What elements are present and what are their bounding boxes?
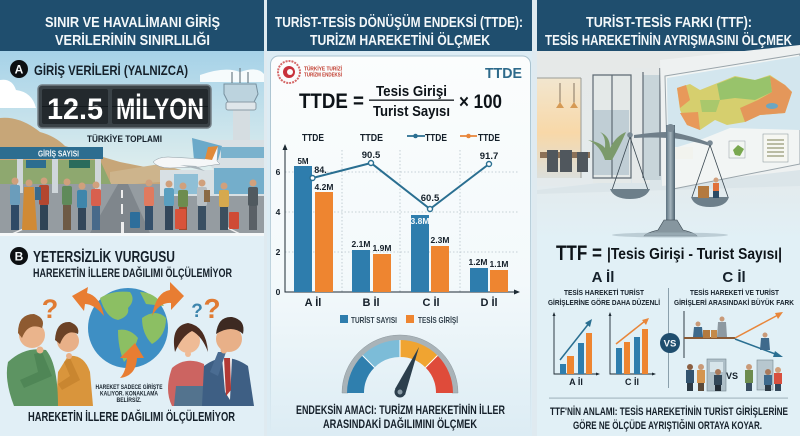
chart legend header: TTDE xyxy=(425,132,447,144)
thinking people, right xyxy=(168,317,254,406)
combo chart: 1.2M xyxy=(469,257,487,267)
turnstile groups: VS xyxy=(726,371,738,381)
arrows leaving globe xyxy=(72,282,184,378)
comparison: C İl xyxy=(674,269,794,391)
combo chart: 1.1M xyxy=(490,259,508,269)
combo chart: 1.9M xyxy=(373,243,391,253)
combo chart: 3.8M xyxy=(411,216,429,226)
combo chart: 6 xyxy=(276,167,281,177)
icon: question marks: ? xyxy=(203,293,221,324)
thinking people, left xyxy=(7,314,93,406)
formula: TTDE: Tesis Girişi xyxy=(376,83,447,100)
index purpose caption: ARASINDAKİ DAĞILIMINI ÖLÇMEK xyxy=(323,418,478,431)
combo chart: C İl xyxy=(422,296,440,309)
airport scene xyxy=(0,51,264,236)
airport terminal and tower xyxy=(160,68,264,196)
divider with VS badge xyxy=(660,288,680,388)
chart legend: TURİST SAYISI xyxy=(351,315,397,325)
icon: question marks: ? xyxy=(191,301,203,322)
left panel heading: VERİLERİNİN SINIRLILIĞI xyxy=(55,31,210,49)
note: movement remains at entry xyxy=(96,383,163,404)
panel: TTDE index xyxy=(267,0,532,436)
map of Türkiye xyxy=(665,54,800,190)
middle panel heading: TURİZM HAREKETİNİ ÖLÇMEK xyxy=(310,32,490,49)
entry gate: GİRİŞ SAYISI: GİRİŞ SAYISI xyxy=(38,150,79,158)
flip board: 12.5 MİLYON xyxy=(38,85,211,128)
note: movement remains at entry: HAREKET SADECE GİRİŞTE xyxy=(96,383,163,391)
logo: tourism index: TURİZM ENDEKSİ xyxy=(304,72,343,78)
chart legend xyxy=(340,315,458,325)
index purpose caption xyxy=(296,404,506,431)
comparison: C İl: C İl xyxy=(722,269,746,286)
icon: airplane xyxy=(153,146,220,171)
office scene xyxy=(537,45,800,240)
middle panel heading xyxy=(267,0,532,51)
combo chart: 4 xyxy=(276,207,281,217)
note: movement remains at entry: BELİRSİZ. xyxy=(116,396,142,404)
icon: balance scale xyxy=(610,124,729,238)
comparison: A İl xyxy=(548,269,660,387)
combo chart: A İl xyxy=(305,296,321,309)
formula: TTDE: Turist Sayısı xyxy=(373,103,450,120)
section A heading xyxy=(10,60,188,78)
combo chart: 2.3M xyxy=(431,235,449,245)
section B heading: HAREKETİN İLLERE DAĞILIMI ÖLÇÜLEMİYOR xyxy=(33,267,233,280)
combo chart: D İl xyxy=(480,296,498,309)
logo: tourism index: TÜRKİYE TURİZİ xyxy=(304,66,343,72)
mini bar chart: A İl xyxy=(552,312,656,387)
icon: question marks xyxy=(42,293,221,324)
chart legend header: TTDE xyxy=(478,132,500,144)
diverging arrows xyxy=(684,311,783,358)
icon: globe xyxy=(88,288,168,368)
flip board: 12.5 MİLYON: MİLYON xyxy=(116,93,204,126)
divider with VS badge: VS xyxy=(664,338,676,350)
formula: TTF xyxy=(556,242,782,265)
section A heading: A xyxy=(15,62,24,76)
formula: TTDE: × 100 xyxy=(459,92,502,113)
label: TTDE: TTDE xyxy=(485,65,522,82)
entry gate: GİRİŞ SAYISI xyxy=(0,147,103,193)
section A heading: GİRİŞ VERİLERİ (YALNIZCA) xyxy=(34,62,188,78)
chart legend: TESİS GİRİŞİ xyxy=(418,315,458,325)
chart legend header: TTDE xyxy=(360,132,383,144)
formula: TTDE xyxy=(299,83,502,120)
meaning of TTF caption xyxy=(549,398,788,432)
combo chart: 4.2M xyxy=(315,182,333,192)
formula: TTDE: TTDE = xyxy=(299,90,364,113)
logo: tourism index xyxy=(278,61,343,83)
comparison: A İl: TESİS HAREKETİ TURİST xyxy=(564,288,644,297)
left panel closing caption: HAREKETİN İLLERE DAĞILIMI ÖLÇÜLEMİYOR xyxy=(28,409,235,424)
panel: TTF difference xyxy=(537,0,800,436)
comparison: C İl: TESİS HAREKETİ VE TURİST xyxy=(690,288,779,297)
right panel heading: TURİST-TESİS FARKI (TTF): xyxy=(586,14,752,31)
chart legend header: TTDE xyxy=(302,132,324,144)
chart legend header xyxy=(302,132,500,144)
icon: question marks: ? xyxy=(42,294,58,324)
combo chart: 90.5 xyxy=(362,150,381,161)
section B heading xyxy=(10,247,233,280)
combo chart: 0 xyxy=(276,287,281,297)
right panel heading xyxy=(537,0,800,51)
comparison: A İl: GİRİŞLERİNE GÖRE DAHA DÜZENLİ xyxy=(548,298,660,307)
combo chart: 60.5 xyxy=(421,193,440,204)
section B heading: B xyxy=(15,250,24,264)
section B heading: YETERSİZLİK VURGUSU xyxy=(33,248,175,266)
mini bar chart: A İl: A İl xyxy=(569,377,583,387)
comparison: A İl: A İl xyxy=(592,269,614,286)
combo chart: 2.1M xyxy=(352,239,370,249)
note: movement remains at entry: KALIYOR. KONAKLAMA xyxy=(100,390,158,398)
combo chart: 2 xyxy=(276,247,281,257)
travellers xyxy=(10,178,258,230)
combo chart: 91.7 xyxy=(480,151,498,162)
gauge xyxy=(342,335,458,398)
combo chart: 84. xyxy=(314,165,327,175)
board caption: TÜRKİYE TOPLAMI xyxy=(87,134,162,145)
left panel heading: SINIR VE HAVALİMANI GİRİŞ xyxy=(45,14,220,31)
panel: border and airport entry data xyxy=(0,0,264,436)
combo chart: B İl xyxy=(362,296,380,309)
mini bar chart: A İl: C İl xyxy=(625,377,639,387)
combo chart: 5M xyxy=(297,157,309,166)
white chart card xyxy=(270,56,530,436)
middle panel heading: TURİST-TESİS DÖNÜŞÜM ENDEKSİ (TTDE): xyxy=(275,14,523,31)
left panel heading xyxy=(0,0,264,51)
index purpose caption: ENDEKSİN AMACI: TURİZM HAREKETİNİN İLLER xyxy=(296,404,506,417)
formula: TTF: TTF = xyxy=(556,242,602,265)
combo chart xyxy=(276,144,520,309)
flip board: 12.5 MİLYON: 12.5 xyxy=(47,93,103,126)
